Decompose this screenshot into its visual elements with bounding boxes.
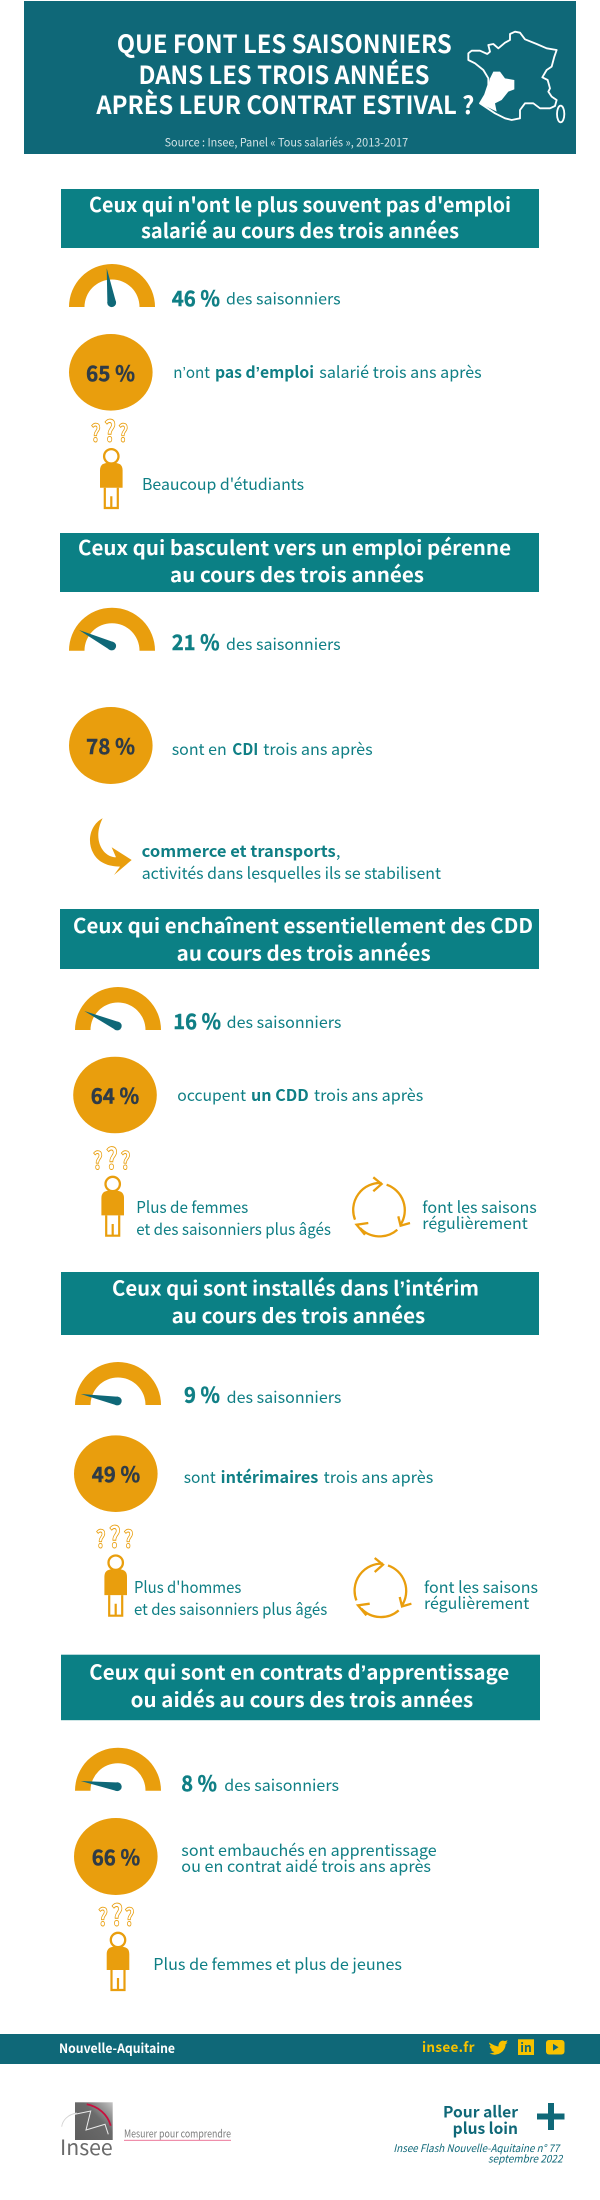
- circle 64 %: 64 %: [91, 1081, 139, 1111]
- text: intérimaires: sont: [184, 1464, 216, 1488]
- icon: twitter: [489, 2040, 508, 2055]
- heading: au cours des trois années: [177, 938, 431, 966]
- text: apprentissage ou contrat aidé: sont embauchés en apprentissage: [181, 1837, 437, 1861]
- text: hommes et âgés: Plus d'hommes: [134, 1574, 241, 1598]
- stat: 9 % des saisonniers: [184, 1380, 341, 1410]
- text: un CDD: [177, 1082, 423, 1106]
- stat: 21 % des saisonniers: [172, 627, 341, 657]
- main title: QUE FONT LES SAISONNIERS: [117, 25, 452, 61]
- main title: APRÈS LEUR CONTRAT ESTIVAL ?: [95, 86, 474, 122]
- gauge 8 %: [75, 1748, 161, 1791]
- circle 78 %: [69, 707, 153, 784]
- text: hommes et âgés: [134, 1574, 327, 1620]
- tagline: Mesurer pour comprendre: [124, 2125, 231, 2141]
- Insee logo: [60, 2102, 231, 2162]
- icon: cycle arrows: [355, 1558, 411, 1617]
- icon: cycle arrows: [353, 1177, 410, 1236]
- text: femmes et âgés: et des saisonniers plus âgés: [136, 1216, 331, 1240]
- circle 49 %: 49 %: [92, 1459, 140, 1489]
- icon: youtube: [546, 2040, 564, 2054]
- stat: 46 % des saisonniers: [172, 283, 341, 313]
- text: commerce et transports: activités dans lesquelles ils se stabilisent: [142, 860, 441, 884]
- text: CDI: CDI: [232, 736, 258, 760]
- heading: [61, 1272, 539, 1335]
- text: intérimaires: intérimaires: [221, 1464, 318, 1488]
- heading: [61, 1655, 540, 1720]
- text: pas d'emploi: [173, 359, 482, 383]
- footer bar: [0, 2034, 600, 2064]
- stat: 8 % des saisonniers: des saisonniers: [224, 1772, 339, 1796]
- gauge 46 %: [69, 264, 155, 307]
- circle 49 %: [74, 1435, 158, 1512]
- heading: Ceux qui basculent vers un emploi pérenne: [78, 532, 511, 561]
- text: un CDD: un CDD: [251, 1082, 309, 1106]
- stat: 16 % des saisonniers: [173, 1006, 341, 1036]
- panel: apprentissage: [61, 1655, 540, 1990]
- text: pas d'emploi: salarié trois ans après: [319, 359, 482, 383]
- text: CDI: trois ans après: [263, 736, 373, 760]
- pour aller plus loin: plus loin: [453, 2117, 518, 2139]
- text: un CDD: trois ans après: [314, 1082, 423, 1106]
- icon: person with question marks: ?: [111, 1892, 123, 1934]
- text: commerce et transports: ,: [336, 838, 340, 862]
- source note: Source : Insee, Panel « Tous salariés », 2013-2017: [165, 134, 408, 150]
- stat: 9 % des saisonniers: 9 %: [184, 1380, 220, 1410]
- header panel: [24, 1, 576, 154]
- publication reference: Insee Flash Nouvelle-Aquitaine n° 77: [393, 2141, 561, 2156]
- heading: salarié au cours des trois années: [141, 215, 459, 244]
- site link: insee.fr: [422, 2036, 475, 2056]
- icon: person with question marks: [96, 1515, 134, 1616]
- icon: curved arrow: [90, 818, 132, 875]
- icon: person with question marks: [93, 1136, 130, 1236]
- gauge 16 %: [75, 987, 161, 1030]
- stat: 46 % des saisonniers: des saisonniers: [226, 286, 341, 310]
- panel: sans emploi salarié: [61, 189, 539, 508]
- panel: intérim: [61, 1272, 539, 1620]
- icon: person with question marks: ?: [118, 414, 128, 449]
- text: pas d'emploi: pas d’emploi: [215, 359, 314, 383]
- icon: person with question marks: [98, 1892, 134, 1990]
- icon: person with question marks: ?: [124, 1898, 134, 1932]
- publication reference: [393, 2141, 564, 2167]
- stat: 16 % des saisonniers: des saisonniers: [227, 1009, 341, 1033]
- stat: 16 % des saisonniers: 16 %: [173, 1006, 221, 1036]
- region name: Nouvelle-Aquitaine: [59, 2038, 175, 2057]
- text: pas d'emploi: n’ont: [173, 359, 210, 383]
- heading: Ceux qui sont en contrats d ’apprentissage: [89, 1657, 509, 1686]
- heading: Ceux qui enchaînent essentiellement des CDD: [73, 910, 533, 939]
- stat: 21 % des saisonniers: 21 %: [172, 627, 220, 657]
- text: commerce et transports: [142, 838, 441, 884]
- heading: Ceux qui sont installés dans l’intérim: [112, 1273, 479, 1302]
- stat: 9 % des saisonniers: des saisonniers: [227, 1384, 341, 1408]
- heading: [60, 532, 539, 592]
- circle 78 %: 78 %: [86, 731, 135, 761]
- circle 65 %: [69, 334, 153, 411]
- main title: DANS LES TROIS ANNÉES: [138, 56, 430, 92]
- text: font les saisons: font les saisons: [422, 1194, 537, 1218]
- text: font les saisons: [424, 1574, 538, 1614]
- text: apprentissage ou contrat aidé: [181, 1837, 437, 1877]
- text: CDI: sont en: [172, 736, 227, 760]
- heading: au cours des trois années: [170, 559, 424, 588]
- stat: 21 % des saisonniers: des saisonniers: [226, 631, 341, 655]
- stat: 8 % des saisonniers: 8 %: [181, 1768, 217, 1798]
- text: femmes et âgés: Plus de femmes: [136, 1194, 248, 1218]
- Insee logo: Insee: [60, 2132, 113, 2162]
- text: font les saisons: font les saisons: [424, 1574, 538, 1598]
- circle 64 %: [73, 1057, 157, 1133]
- heading: [60, 909, 539, 969]
- icon: plus: [537, 2103, 564, 2130]
- icon: person with question marks: ?: [104, 409, 116, 451]
- stat: 46 % des saisonniers: 46 %: [172, 283, 220, 313]
- text: femmes et jeunes: Plus de femmes et plus de jeunes: [153, 1951, 402, 1975]
- text: intérimaires: [184, 1464, 433, 1488]
- icon: person with question marks: [91, 409, 128, 508]
- icon: map of France: [468, 32, 564, 122]
- icon: person with question marks: ?: [98, 1898, 108, 1932]
- circle 65 %: 65 %: [86, 358, 135, 388]
- text: commerce et transports: commerce et transports: [142, 838, 336, 862]
- main title: [95, 25, 474, 122]
- text: font les saisons: régulièrement: [422, 1210, 528, 1234]
- heading: Ceux qui n'ont le plus souvent pas d'emploi: [89, 189, 511, 218]
- icon: linkedin: in: [520, 2037, 532, 2056]
- text: CDI: [172, 736, 373, 760]
- icon: person with question marks: ?: [96, 1520, 106, 1555]
- icon: person with question marks: ?: [91, 414, 101, 449]
- icon: person with question marks: ?: [109, 1515, 121, 1557]
- pour aller plus loin: [393, 2101, 564, 2167]
- text: font les saisons: régulièrement: [424, 1590, 529, 1614]
- stat: 8 % des saisonniers: [181, 1768, 339, 1798]
- heading: [61, 189, 539, 248]
- circle 66 %: [74, 1818, 158, 1895]
- text: étudiants: Beaucoup d'étudiants: [142, 471, 304, 495]
- text: apprentissage ou contrat aidé: ou en contrat aidé trois ans après: [181, 1853, 431, 1877]
- text: un CDD: occupent: [177, 1082, 246, 1106]
- icon: person with question marks: ?: [106, 1136, 118, 1178]
- text: intérimaires: trois ans après: [324, 1464, 433, 1488]
- panel: CDD: [60, 909, 539, 1240]
- circle 66 %: 66 %: [92, 1842, 140, 1872]
- icon: person with question marks: ?: [120, 1141, 130, 1176]
- text: font les saisons: [422, 1194, 537, 1234]
- gauge 21 %: [69, 608, 155, 651]
- heading: ou aidés au cours des trois années: [131, 1684, 473, 1713]
- gauge 9 %: [75, 1362, 161, 1405]
- text: hommes et âgés: et des saisonniers plus âgés: [134, 1596, 327, 1620]
- heading: au cours des trois années: [172, 1300, 425, 1329]
- publication reference: septembre 2022: [488, 2152, 564, 2167]
- text: femmes et âgés: [136, 1194, 331, 1240]
- panel: emploi pérenne: [60, 532, 539, 884]
- icon: person with question marks: ?: [123, 1520, 133, 1555]
- pour aller plus loin: Pour aller: [443, 2101, 518, 2123]
- icon: person with question marks: ?: [93, 1141, 103, 1176]
